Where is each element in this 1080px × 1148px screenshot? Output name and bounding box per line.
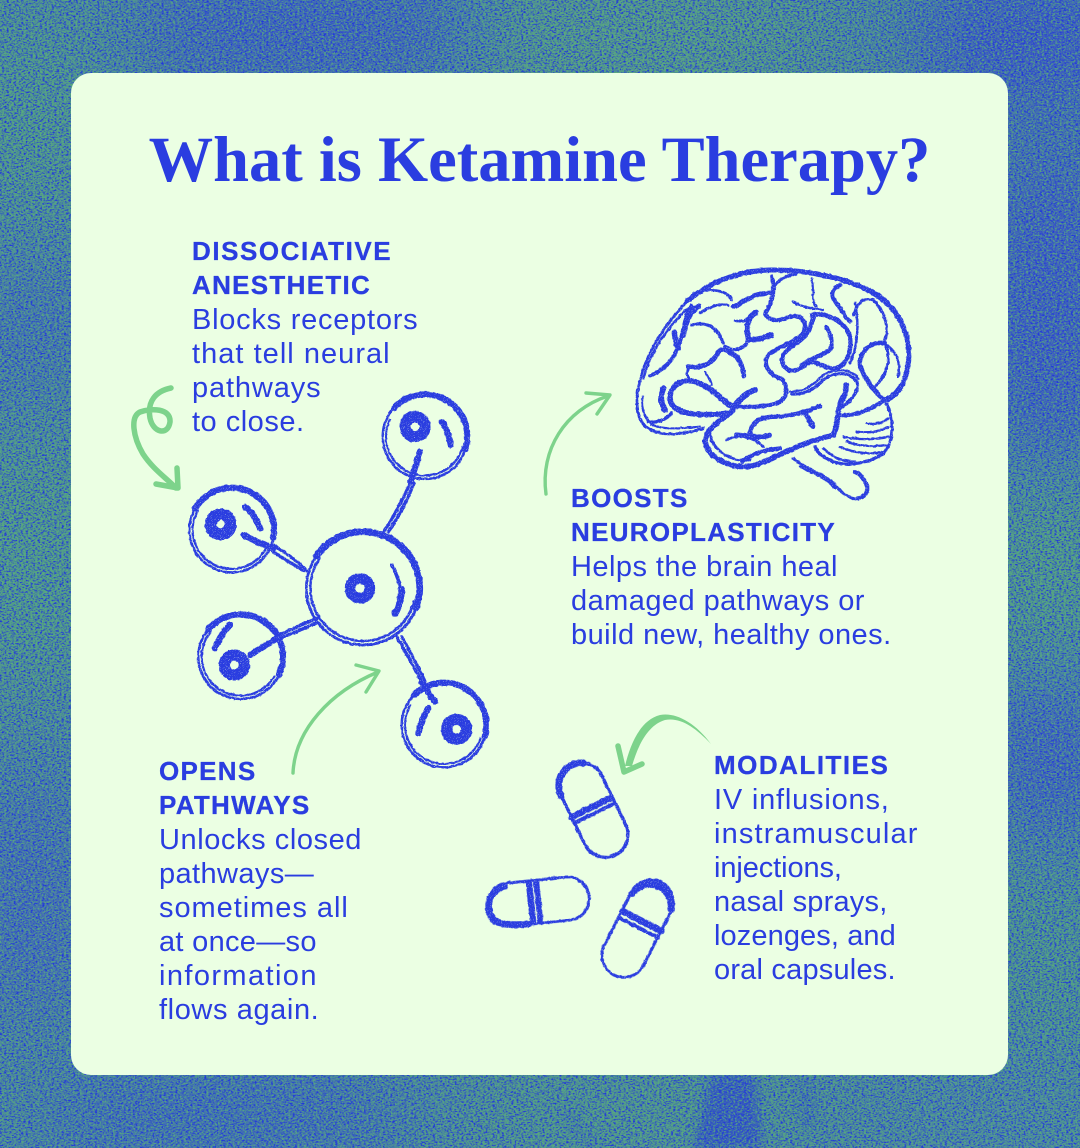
text: modalities: nasal sprays, bbox=[714, 886, 887, 918]
text: dissociative anesthetic: DISSOCIATIVE bbox=[192, 236, 392, 266]
text: dissociative anesthetic: to close. bbox=[192, 406, 304, 438]
text: opens pathways: pathways— bbox=[159, 858, 314, 890]
text: opens pathways: flows again. bbox=[159, 994, 319, 1026]
central node bbox=[284, 509, 442, 667]
text: opens pathways: at once—so bbox=[159, 926, 317, 958]
text: modalities: instramuscular bbox=[714, 818, 919, 850]
text: boosts neuroplasticity bbox=[571, 483, 892, 651]
text: boosts neuroplasticity: BOOSTS bbox=[571, 483, 689, 513]
text: opens pathways: sometimes all bbox=[159, 892, 349, 924]
text: opens pathways bbox=[159, 756, 362, 1026]
connector lines bbox=[243, 452, 435, 702]
text: boosts neuroplasticity: damaged pathways or bbox=[571, 585, 865, 617]
text: modalities: MODALITIES bbox=[714, 750, 889, 780]
title: What is Ketamine Therapy? bbox=[149, 124, 930, 195]
icon: neuron network bbox=[174, 377, 504, 785]
text: opens pathways: information bbox=[159, 960, 318, 992]
text: dissociative anesthetic bbox=[192, 236, 418, 438]
text: boosts neuroplasticity: build new, healthy ones. bbox=[571, 619, 892, 651]
text: opens pathways: OPENS bbox=[159, 756, 257, 786]
text: modalities bbox=[714, 750, 919, 986]
capsule right bbox=[594, 872, 681, 985]
text: modalities: injections, bbox=[714, 852, 842, 884]
text: modalities: lozenges, and bbox=[714, 920, 896, 952]
brain outer contour bbox=[637, 270, 909, 434]
text: dissociative anesthetic: ANESTHETIC bbox=[192, 270, 371, 300]
lower-right node bbox=[384, 665, 504, 785]
lower-left node bbox=[181, 597, 300, 716]
arrow: to central node bbox=[293, 665, 379, 773]
text: dissociative anesthetic: Blocks receptors bbox=[192, 304, 418, 336]
arrow: to brain bbox=[545, 393, 610, 494]
text: boosts neuroplasticity: NEUROPLASTICITY bbox=[571, 517, 836, 547]
capsule left bbox=[485, 875, 591, 929]
arrow: to capsules bbox=[618, 714, 711, 772]
upper-left node bbox=[174, 472, 289, 588]
white-green content card bbox=[71, 73, 1008, 1075]
text: dissociative anesthetic: pathways bbox=[192, 372, 321, 404]
text: dissociative anesthetic: that tell neural bbox=[192, 338, 391, 370]
text: boosts neuroplasticity: Helps the brain heal bbox=[571, 551, 838, 583]
text: modalities: oral capsules. bbox=[714, 954, 896, 986]
text: modalities: IV influsions, bbox=[714, 784, 890, 816]
top-right node bbox=[365, 377, 485, 496]
arrow: to neuron network from dissociative anesthetic bbox=[134, 388, 178, 488]
text: opens pathways: Unlocks closed bbox=[159, 824, 362, 856]
icon: capsules bbox=[485, 755, 681, 985]
text: opens pathways: PATHWAYS bbox=[159, 790, 310, 820]
brain folds bbox=[648, 274, 903, 499]
capsule top bbox=[551, 755, 636, 865]
icon: brain bbox=[637, 270, 909, 499]
